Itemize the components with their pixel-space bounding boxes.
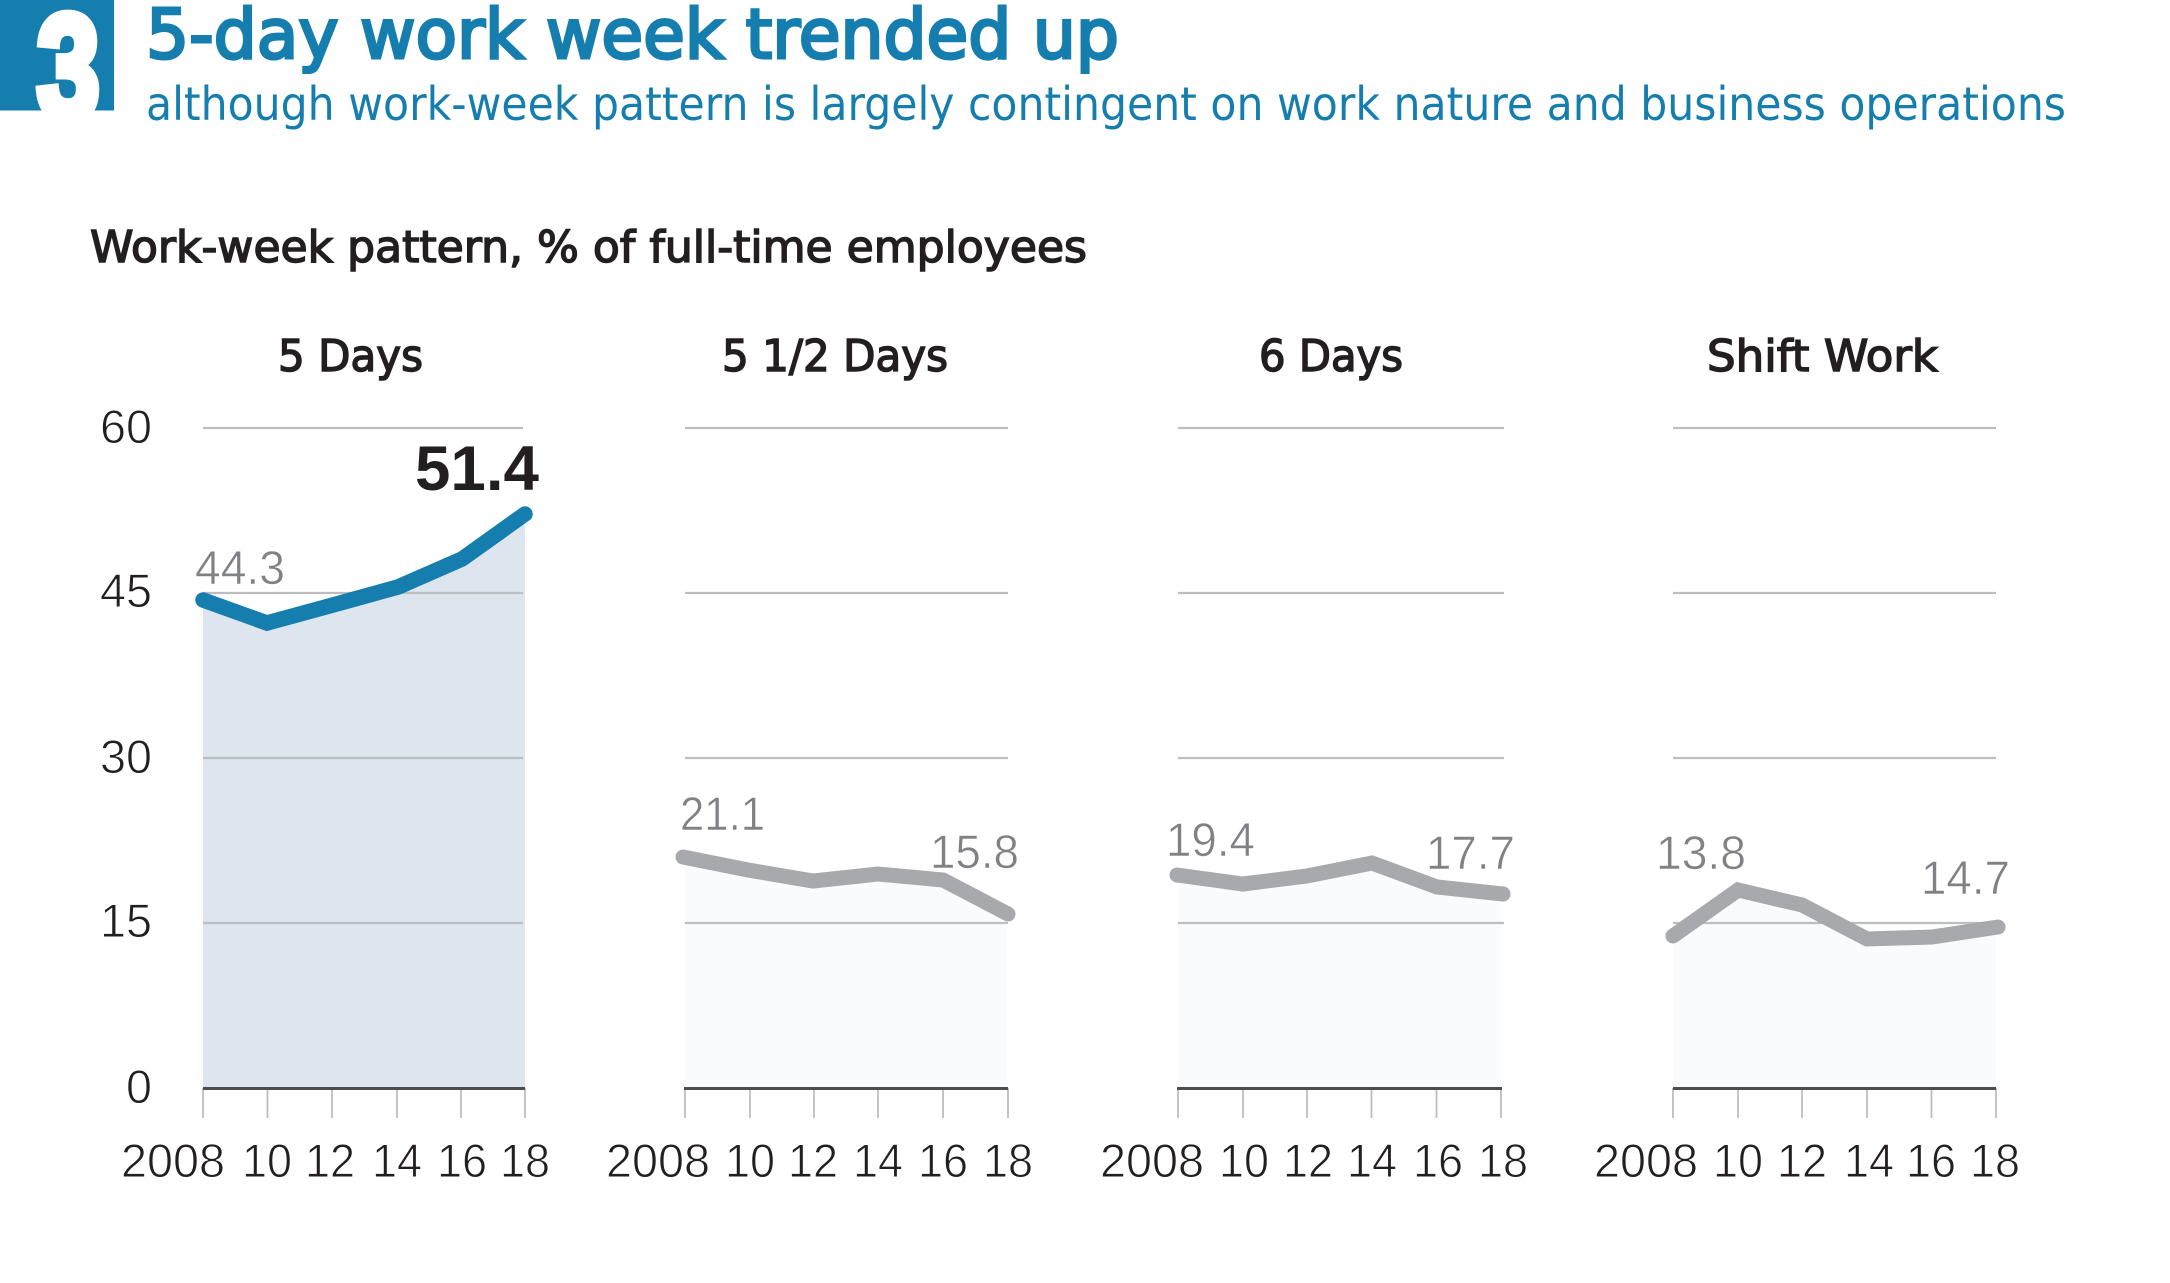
x axis labels: 16 [437, 1134, 487, 1187]
x axis labels: 18 [1970, 1134, 2020, 1187]
icon: section number 3 [0, 0, 114, 110]
x axis labels: 16 [1413, 1134, 1463, 1187]
x axis labels: 10 [725, 1134, 775, 1187]
x axis labels: 12 [1283, 1134, 1333, 1187]
value label 2018: 14.7 [1921, 851, 2010, 904]
baseline and ticks [684, 1088, 1008, 1118]
value label 2018: 15.8 [930, 825, 1019, 878]
panel title: 5 Days [278, 331, 423, 382]
x axis labels: 2008 [1594, 1134, 1698, 1187]
x axis labels [1594, 1134, 2020, 1187]
line: 5 days series [203, 514, 525, 623]
header [0, 0, 2064, 130]
x axis labels: 12 [788, 1134, 838, 1187]
x axis labels: 10 [1219, 1134, 1269, 1187]
y axis labels: 15 [100, 894, 152, 947]
y axis labels: 60 [100, 400, 152, 453]
subtitle: although work-week pattern is largely contingent on work nature and business operations [146, 77, 2066, 131]
x axis labels: 2008 [1100, 1134, 1204, 1187]
panel: 5 1/2 Days [606, 331, 1033, 1187]
value label 2008: 19.4 [1166, 813, 1255, 866]
grid lines [1673, 428, 1996, 923]
panel title: Shift Work [1707, 331, 1939, 382]
x axis labels: 2008 [121, 1134, 225, 1187]
x axis labels: 18 [1478, 1134, 1528, 1187]
x axis labels: 14 [1347, 1134, 1397, 1187]
area fill [203, 514, 525, 1088]
x axis labels: 2008 [606, 1134, 710, 1187]
x axis labels: 16 [918, 1134, 968, 1187]
baseline and ticks [203, 1088, 525, 1118]
grid lines [203, 428, 523, 923]
value label 2008: 44.3 [195, 541, 285, 594]
x axis labels: 14 [1844, 1134, 1894, 1187]
x axis labels: 12 [305, 1134, 355, 1187]
x axis labels: 18 [500, 1134, 550, 1187]
y axis labels: 45 [100, 564, 152, 617]
panel: Shift Work [1594, 331, 2020, 1187]
y axis labels: 0 [126, 1060, 152, 1113]
grid lines [1178, 428, 1504, 923]
panel title: 5 1/2 Days [722, 331, 948, 382]
line: 6 days series [1177, 863, 1503, 894]
x axis labels: 10 [242, 1134, 292, 1187]
x axis labels [121, 1134, 550, 1187]
x axis labels: 16 [1906, 1134, 1956, 1187]
x axis labels [1100, 1134, 1528, 1187]
grid lines [685, 428, 1008, 923]
area fill [685, 857, 1007, 1088]
area fill [1178, 862, 1501, 1088]
baseline and ticks [1673, 1088, 1996, 1118]
panel: 5 Days [121, 331, 550, 1187]
line: shift work series [1673, 890, 1998, 939]
x axis labels: 14 [853, 1134, 903, 1187]
value label 2008: 21.1 [680, 787, 765, 840]
x axis labels: 14 [372, 1134, 422, 1187]
y axis labels: 30 [100, 730, 152, 783]
panel: 6 Days [1100, 331, 1528, 1187]
x axis labels: 12 [1777, 1134, 1827, 1187]
value label 2008: 13.8 [1656, 826, 1746, 879]
value label 2018: 17.7 [1426, 826, 1515, 879]
x axis labels: 10 [1713, 1134, 1763, 1187]
x axis labels [606, 1134, 1033, 1187]
x axis labels: 18 [983, 1134, 1033, 1187]
baseline and ticks [1177, 1088, 1502, 1118]
chart heading: Work-week pattern, % of full-time employees [90, 222, 1087, 273]
area fill [1673, 890, 1996, 1088]
panel title: 6 Days [1259, 331, 1403, 382]
line: 5 1/2 days series [683, 857, 1008, 914]
y axis labels [100, 400, 152, 1113]
value label 2018: 51.4 [415, 434, 539, 504]
